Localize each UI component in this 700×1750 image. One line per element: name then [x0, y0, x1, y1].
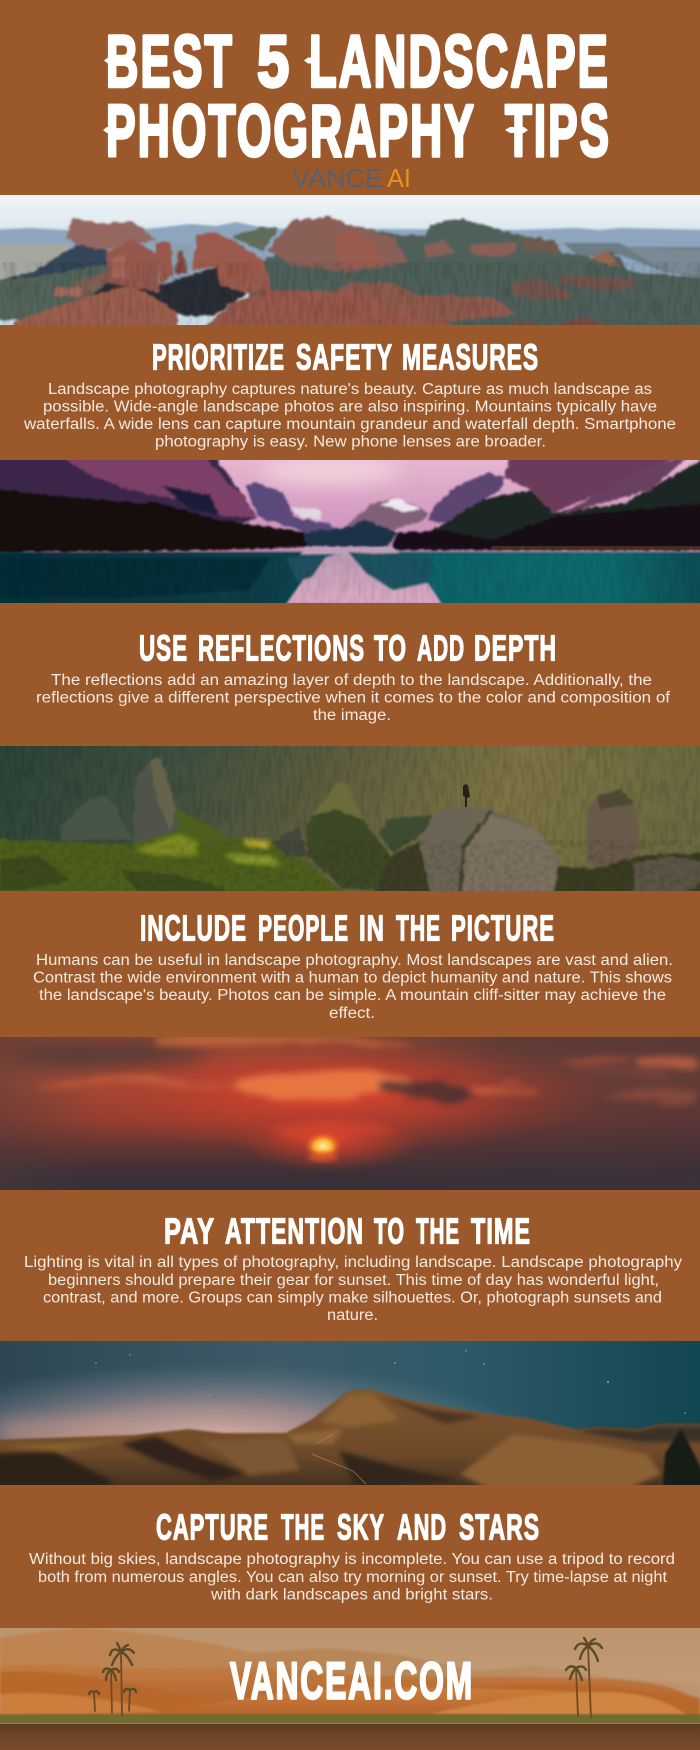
stars: [95, 1350, 686, 1414]
title: BEST: [106, 22, 234, 102]
body text: Lighting is vital in all types of photography, including landscape. Landscape photography: [24, 1254, 682, 1271]
heading: ADD: [417, 628, 465, 668]
body text: [23, 381, 676, 450]
heading: PICTURE: [451, 908, 555, 948]
heading: SKY: [337, 1506, 385, 1548]
heading: STARS: [459, 1506, 540, 1548]
heading: [164, 1210, 531, 1252]
photo: person on a rock above green valley: [0, 746, 700, 895]
body text: Landscape photography captures nature's beauty. Capture as much landscape as: [48, 381, 652, 398]
heading: PEOPLE: [258, 908, 349, 948]
photo: red rock mesas under pale sky: [0, 195, 700, 335]
body text: [33, 952, 673, 1022]
body text: photography is easy. New phone lenses are broader.: [155, 434, 546, 450]
figure standing on rock: [463, 784, 470, 807]
footer website label: VANCEAI.COM: [230, 1652, 474, 1710]
panel: use reflections to add depth: [0, 603, 700, 746]
body text: Contrast the wide environment with a human to depict humanity and nature. This shows: [33, 970, 672, 986]
heading: [139, 628, 557, 668]
body text: both from numerous angles. You can also try morning or sunset. Try time-lapse at night: [38, 1569, 668, 1586]
panel: pay attention to the time: [0, 1190, 700, 1341]
title: TIPS: [505, 91, 611, 172]
heading: PRIORITIZE: [152, 336, 285, 378]
body text: Without big skies, landscape photography is incomplete. You can use a tripod to record: [29, 1551, 675, 1568]
heading: TIME: [471, 1210, 531, 1252]
heading: CAPTURE: [156, 1506, 269, 1548]
distant dunes: [0, 1628, 700, 1722]
body text: beginners should prepare their gear for sunset. This time of day has wonderful light,: [48, 1272, 659, 1289]
sunlit patches on the green slope: [134, 834, 281, 866]
body text: Humans can be useful in landscape photography. Most landscapes are vast and alien.: [36, 952, 673, 969]
photo: mountain lake with pink sky: [0, 460, 700, 603]
body text: [24, 1254, 682, 1324]
photo: red sunset: [0, 1035, 700, 1190]
body text: the landscape's beauty. Photos can be simple. A mountain cliff-sitter may achieve the: [39, 987, 666, 1004]
heading: THE: [281, 1506, 325, 1548]
heading: TO: [374, 1210, 405, 1252]
heading: IN: [359, 908, 385, 948]
body text: reflections give a different perspective when it comes to the color and composition of: [36, 690, 671, 706]
panel: prioritize safety measures: [0, 325, 700, 460]
body text: possible. Wide-angle landscape photos are also inspiring. Mountains typically have: [43, 398, 657, 416]
body text: the image.: [313, 707, 391, 724]
title: [103, 22, 611, 172]
body text: [29, 1551, 675, 1604]
logo: VanceAI: VANCE: [292, 163, 383, 193]
heading: SAFETY: [296, 336, 393, 378]
photo: desert mountain under starry dusk sky: [0, 1341, 700, 1485]
header panel: [0, 0, 700, 193]
heading: [152, 336, 539, 378]
heading: USE: [139, 628, 188, 668]
body text: with dark landscapes and bright stars.: [210, 1586, 493, 1604]
heading: PAY: [164, 1210, 215, 1252]
heading: [140, 908, 555, 948]
logo: VanceAI: AI: [387, 163, 411, 193]
heading: AND: [397, 1506, 447, 1548]
footer: desert dunes with palms: [0, 1628, 700, 1750]
body text: nature.: [327, 1307, 378, 1324]
palm trees: [89, 1638, 602, 1718]
heading: MEASURES: [402, 336, 539, 378]
body text: waterfalls. A wide lens can capture mountain grandeur and waterfall depth. Smartphone: [23, 416, 676, 433]
heading: ATTENTION: [225, 1210, 364, 1252]
panel: include people in the picture: [0, 891, 700, 1037]
heading: THE: [396, 908, 441, 948]
heading: TO: [374, 628, 407, 668]
body text: [36, 672, 671, 724]
body text: effect.: [329, 1005, 375, 1022]
title: PHOTOGRAPHY: [106, 91, 476, 172]
title: 5: [257, 22, 292, 102]
body text: contrast, and more. Groups can simply make silhouettes. Or, photograph sunsets and: [43, 1290, 662, 1306]
mountain light and shadow: [0, 1394, 700, 1495]
heading: [156, 1506, 540, 1548]
heading: INCLUDE: [140, 908, 247, 948]
panel: capture the sky and stars: [0, 1485, 700, 1628]
heading: REFLECTIONS: [198, 628, 365, 668]
heading: THE: [416, 1210, 460, 1252]
body text: The reflections add an amazing layer of depth to the landscape. Additionally, the: [51, 672, 652, 689]
heading: DEPTH: [474, 628, 557, 668]
